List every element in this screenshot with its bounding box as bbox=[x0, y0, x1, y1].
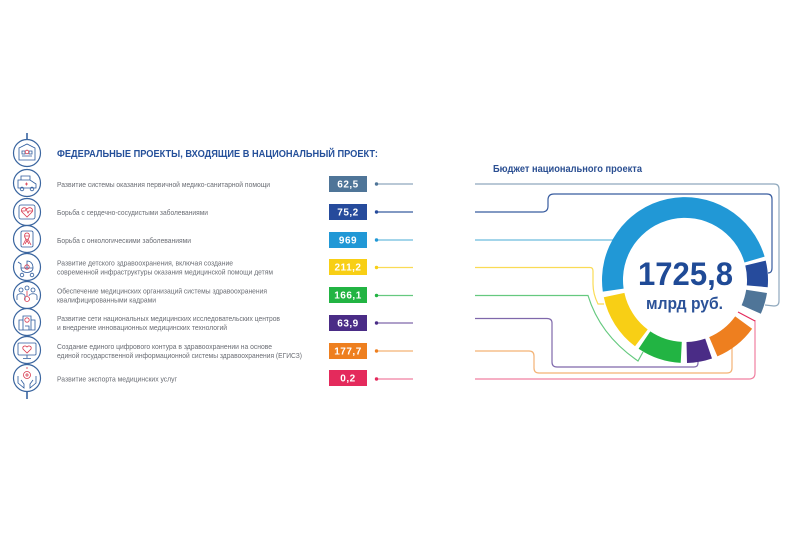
project 7 label: единой государственной информационной системы здравоохранения (ЕГИСЗ) bbox=[57, 351, 302, 360]
project list bbox=[57, 180, 302, 384]
segment: primary care 62,5 bbox=[742, 290, 767, 314]
badge 62,5: 62,5 bbox=[337, 180, 359, 190]
value badges bbox=[329, 176, 367, 386]
segment: research 63,9 bbox=[686, 339, 712, 363]
leader stubs with dots bbox=[375, 182, 413, 381]
badge 62,5 bbox=[329, 176, 367, 192]
badge 0,2 bbox=[329, 370, 367, 386]
project 8 label: Развитие экспорта медицинских услуг bbox=[57, 374, 177, 384]
badge 177,7 bbox=[329, 343, 367, 359]
project 1 label: Развитие системы оказания первичной медико-санитарной помощи bbox=[57, 180, 270, 189]
project 2 label: Борьба с сердечно-сосудистыми заболеваниями bbox=[57, 208, 208, 217]
project 4 label: Развитие детского здравоохранения, включая создание bbox=[57, 258, 233, 268]
badge 166,1: 166,1 bbox=[334, 290, 362, 302]
badge 75,2: 75,2 bbox=[337, 208, 359, 218]
title: ФЕДЕРАЛЬНЫЕ ПРОЕКТЫ, ВХОДЯЩИЕ В НАЦИОНАЛЬНЫЙ ПРОЕКТ: bbox=[57, 147, 378, 160]
segment: children 211,2 bbox=[604, 293, 648, 346]
segment: oncology 969 bbox=[602, 197, 765, 292]
connector lines bbox=[475, 184, 779, 379]
donut chart bbox=[602, 197, 768, 363]
project 4 label: современной инфраструктуры оказания медицинской помощи детям bbox=[57, 268, 273, 276]
project 6 label: и внедрение инновационных медицинских технологий bbox=[57, 323, 227, 332]
badge 166,1 bbox=[329, 287, 367, 303]
project 3 label: Борьба с онкологическими заболеваниями bbox=[57, 236, 191, 245]
total unit: млрд руб. bbox=[646, 295, 723, 313]
project 4 label bbox=[57, 258, 273, 276]
segment: staff 166,1 bbox=[639, 331, 682, 363]
icon column bbox=[14, 133, 40, 399]
project 7 label bbox=[57, 342, 302, 360]
badge 211,2 bbox=[329, 259, 367, 275]
icon: hands with cross bbox=[14, 364, 40, 392]
badge 969 bbox=[329, 232, 367, 248]
icon: baby stroller bbox=[14, 254, 40, 280]
project 6 label bbox=[57, 314, 280, 332]
icon: medical staff bbox=[14, 282, 40, 308]
project 5 label bbox=[57, 286, 267, 304]
icon: ambulance bbox=[14, 170, 40, 196]
badge 211,2: 211,2 bbox=[335, 262, 361, 274]
badge 0,2: 0,2 bbox=[340, 374, 356, 384]
project 6 label: Развитие сети национальных медицинских исследовательских центров bbox=[57, 314, 280, 323]
segment: cardio 75,2 bbox=[745, 261, 768, 287]
project 5 label: квалифицированными кадрами bbox=[57, 296, 156, 304]
icon: heart monitor bbox=[14, 198, 40, 226]
badge 969: 969 bbox=[339, 236, 357, 246]
icon: medical building bbox=[14, 140, 40, 166]
total value: 1725,8 bbox=[638, 256, 733, 292]
badge 63,9 bbox=[329, 315, 367, 331]
icon: awareness ribbon bbox=[14, 226, 40, 252]
project 7 label: Создание единого цифрового контура в здравоохранении на основе bbox=[57, 342, 272, 351]
icon: digital monitor bbox=[14, 336, 40, 364]
icon: research centre bbox=[14, 308, 40, 336]
badge 177,7: 177,7 bbox=[334, 346, 362, 358]
segment: digital 177,7 bbox=[709, 316, 752, 356]
project 5 label: Обеспечение медицинских организаций системы здравоохранения bbox=[57, 286, 267, 296]
badge 63,9: 63,9 bbox=[337, 318, 359, 330]
budget heading: Бюджет национального проекта bbox=[493, 164, 642, 175]
badge 75,2 bbox=[329, 204, 367, 220]
